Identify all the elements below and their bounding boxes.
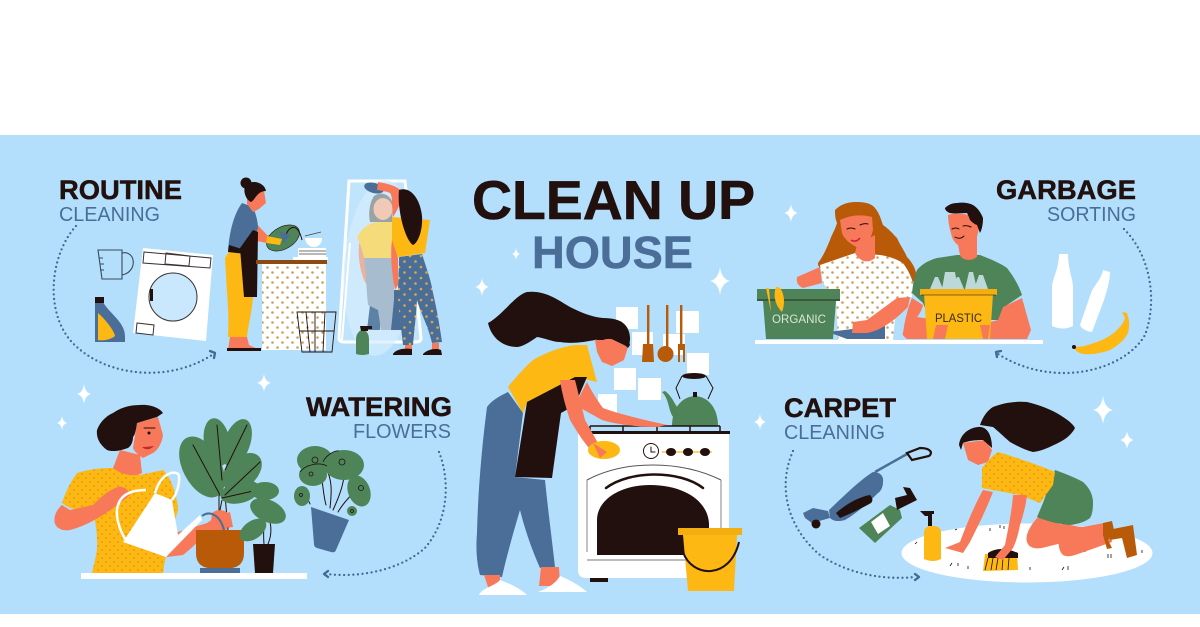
laundry basket	[297, 312, 336, 352]
title: HOUSE	[532, 227, 693, 278]
plastic bin with bottles	[920, 272, 997, 339]
panel: center woman cleaning oven	[476, 292, 742, 595]
icon: scrub brush	[983, 549, 1018, 571]
panel: carpet cleaning	[784, 393, 1152, 582]
icon: banana	[1072, 312, 1129, 354]
heading: garbage sorting: GARBAGE	[996, 175, 1136, 205]
plant: large leaves in brown pot	[170, 415, 269, 573]
figure: woman with organic bin	[797, 202, 916, 340]
heading: watering flowers: FLOWERS	[353, 421, 451, 443]
organic bin	[757, 287, 840, 339]
arms	[945, 490, 993, 553]
heading: routine cleaning: ROUTINE	[59, 175, 182, 205]
figure: woman washing dishes	[225, 178, 282, 351]
plant: pilea in blue pot	[294, 446, 375, 552]
sponge	[588, 441, 620, 459]
sink counter with plates	[256, 219, 328, 350]
blue background panel	[0, 135, 1200, 614]
heading: watering flowers: WATERING	[306, 392, 452, 422]
shirt	[982, 452, 1055, 503]
icon: measuring cup	[98, 250, 133, 279]
table: watering	[81, 573, 307, 579]
heading: routine cleaning: CLEANING	[59, 204, 160, 226]
plastic bin with bottles: PLASTIC	[935, 311, 982, 325]
heading: routine cleaning	[59, 175, 182, 226]
trousers	[476, 392, 555, 577]
arrow: watering dotted	[324, 452, 446, 577]
arrow: carpet dotted	[786, 451, 919, 580]
oven	[578, 426, 730, 582]
arrow: garbage dotted	[996, 229, 1151, 373]
icon: watering can	[117, 473, 202, 557]
icon: washing machine	[133, 248, 213, 341]
icon: white plastic bottles	[1052, 254, 1110, 332]
icon: kettle	[662, 373, 718, 426]
title: CLEAN UP	[472, 169, 755, 231]
long ponytail hair	[488, 292, 630, 347]
icon: detergent bottle	[95, 297, 125, 342]
figure: woman at oven	[476, 292, 667, 595]
heading: watering flowers	[306, 392, 452, 443]
icon: yellow spray bottle	[920, 511, 941, 561]
carpet tufts	[915, 525, 1142, 570]
mirror with woman	[338, 178, 442, 358]
heading: garbage sorting: SORTING	[1047, 204, 1136, 226]
icon: green spray bottle	[859, 487, 917, 543]
panel: watering flowers	[54, 392, 452, 579]
socks	[1103, 521, 1114, 549]
slippers and feet	[484, 567, 560, 590]
icon: vacuum cleaner	[803, 448, 931, 528]
heading: garbage sorting	[996, 175, 1136, 226]
hair	[980, 402, 1075, 452]
shorts	[1037, 470, 1093, 525]
plant: small plant in black pot	[236, 482, 290, 573]
near leg	[1059, 522, 1112, 556]
table: garbage	[755, 340, 1043, 344]
hanging utensils	[642, 305, 685, 362]
panel: routine cleaning	[54, 175, 442, 373]
arrow: routine dotted	[54, 226, 215, 373]
wall tiles	[598, 307, 709, 413]
near arm	[995, 495, 1027, 560]
sparkles	[57, 204, 1134, 449]
panel: garbage sorting	[755, 175, 1151, 373]
figure: woman watering	[54, 405, 233, 573]
heading: carpet cleaning	[784, 393, 897, 444]
icon: bucket	[678, 528, 742, 591]
organic bin: ORGANIC	[772, 312, 826, 326]
white carpet	[902, 524, 1152, 582]
heading: carpet cleaning: CARPET	[784, 393, 897, 423]
far leg	[1027, 515, 1108, 548]
far arm	[575, 382, 667, 427]
figure: woman scrubbing carpet	[945, 402, 1137, 558]
title	[472, 169, 755, 278]
heading: carpet cleaning: CLEANING	[784, 422, 885, 444]
figure: man with plastic bin	[903, 203, 1031, 339]
spray bottle	[356, 326, 372, 355]
